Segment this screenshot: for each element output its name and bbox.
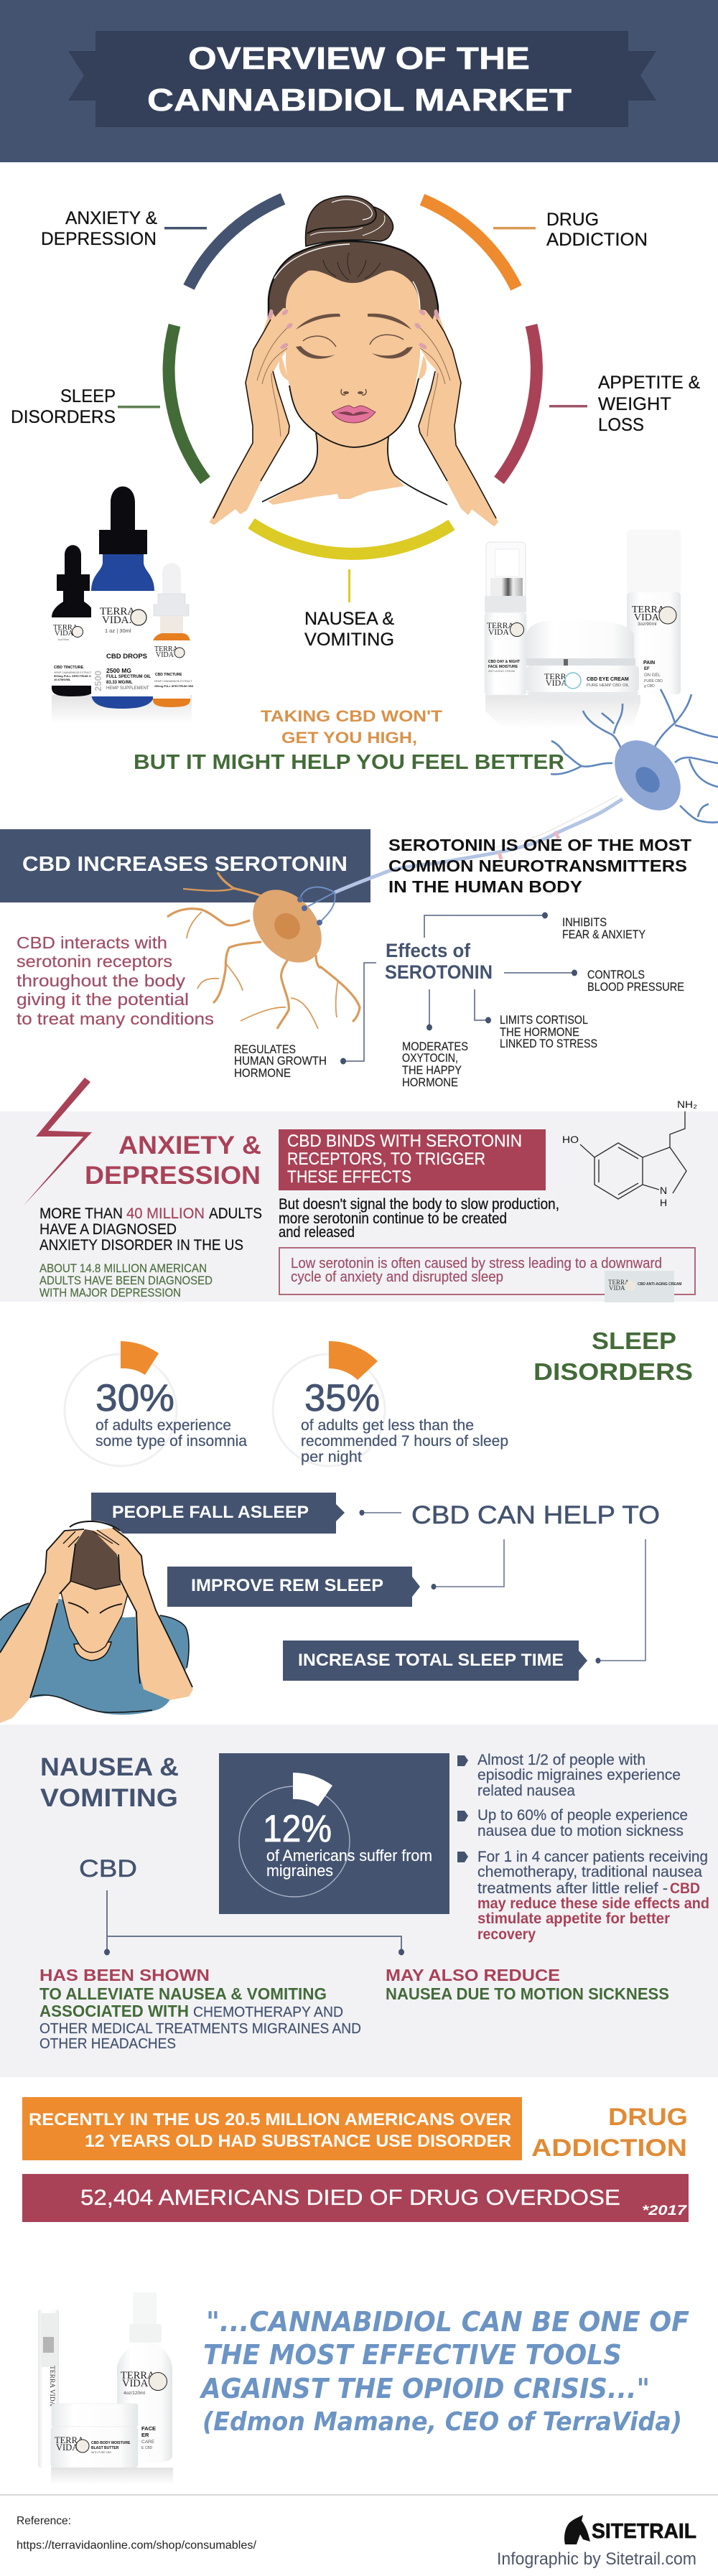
pen applicator bbox=[38, 2310, 59, 2468]
text: production: and released bbox=[279, 1224, 355, 1241]
product: small jar: TERRA bbox=[608, 1279, 630, 1286]
effects labels: OXYTOCIN, bbox=[402, 1051, 458, 1065]
stat: 40 million: ANXIETY DISORDER IN THE US bbox=[39, 1237, 243, 1254]
bullets: nausea facts: recovery bbox=[477, 1926, 536, 1943]
tagline bbox=[134, 707, 564, 774]
donut: 30 percent bbox=[65, 1341, 247, 1466]
card: 12 percent: migraines bbox=[266, 1862, 333, 1880]
bullets: nausea facts: Almost 1/2 of people with bbox=[477, 1752, 645, 1768]
spray bottle: CARE bbox=[141, 2440, 155, 2445]
body butter jar: CBD BODY MOISTURE bbox=[91, 2441, 131, 2445]
cream jar: CBD EYE CREAM bbox=[587, 677, 629, 682]
product: small jar: VIDA bbox=[609, 1284, 625, 1292]
banner: people fall asleep bbox=[91, 1493, 345, 1534]
text: has been shown: ASSOCIATED WITH bbox=[39, 2002, 189, 2020]
heading: sleep disorders: DISORDERS bbox=[533, 1358, 693, 1385]
receptor dots bbox=[297, 897, 322, 925]
title: OVERVIEW OF THE bbox=[188, 41, 530, 76]
header panel bbox=[0, 0, 718, 162]
cream jar: VIDA. bbox=[546, 678, 569, 688]
heading: serotonin fact: IN THE HUMAN BODY bbox=[388, 877, 582, 896]
blue bottle: TERRA bbox=[100, 606, 135, 617]
stat: 40 million: MORE THAN bbox=[39, 1205, 123, 1222]
effects labels: LIMITS CORTISOL bbox=[500, 1013, 588, 1027]
black bottle: TERRA bbox=[53, 624, 78, 632]
face bbox=[61, 1581, 128, 1653]
icon: lightning bolt bbox=[23, 1078, 92, 1206]
card: 12 percent bbox=[219, 1753, 449, 1914]
tall tube: PAIN bbox=[643, 661, 655, 666]
callout: low serotonin: Low serotonin is often caused by stress leading to a downward bbox=[291, 1256, 662, 1271]
logo: Sitetrail: SITETRAIL bbox=[592, 2520, 696, 2543]
arc: nausea bbox=[251, 523, 452, 554]
effects labels: FEAR & ANXIETY bbox=[562, 928, 645, 941]
stat: 40 million: ADULTS bbox=[209, 1205, 262, 1222]
body butter jar: VIDA bbox=[56, 2442, 78, 2453]
bullets: nausea facts: chemotherapy, traditional nausea bbox=[477, 1864, 702, 1880]
left hand bbox=[210, 308, 294, 524]
callout: substance use: RECENTLY IN THE US 20.5 MILLION AMERICANS OVER bbox=[29, 2110, 511, 2129]
credit: Infographic by Sitetrail.com bbox=[497, 2549, 696, 2569]
text: has been shown: OTHER HEADACHES bbox=[39, 2036, 176, 2052]
white gap behind the man's head bbox=[45, 1521, 144, 1618]
stat: 14.8 million: WITH MAJOR DEPRESSION bbox=[39, 1286, 181, 1299]
text: CBD interacts bbox=[17, 933, 214, 1028]
spray bottle: TERRA bbox=[121, 2370, 155, 2381]
callout: overdose deaths bbox=[22, 2174, 689, 2222]
body butter jar: TERRA bbox=[55, 2435, 84, 2445]
label: appetite bbox=[549, 373, 700, 435]
pump bottle: CBD DAY & NIGHT bbox=[488, 660, 520, 664]
references bbox=[17, 2515, 257, 2552]
label: appetite: APPETITE & bbox=[598, 373, 700, 393]
bullets: nausea facts: stimulate appetite for better bbox=[477, 1910, 670, 1927]
effects labels: MODERATES bbox=[402, 1040, 468, 1053]
hair bbox=[269, 241, 438, 323]
heading: nausea and vomiting: VOMITING bbox=[40, 1784, 178, 1812]
banner: increase total sleep time bbox=[283, 1641, 587, 1681]
blue bottle: 1 oz | 30ml bbox=[105, 627, 131, 634]
text: may also reduce bbox=[386, 1966, 669, 2003]
shirt bbox=[0, 1599, 189, 1714]
connectors bbox=[343, 915, 574, 1061]
tall tube: ON GEL bbox=[644, 673, 661, 678]
heading: serotonin fact bbox=[388, 836, 691, 896]
blue bottle: CBD DROPS bbox=[106, 653, 147, 661]
panel: CBD increases serotonin bbox=[0, 829, 370, 902]
hair bbox=[70, 1529, 121, 1590]
heading: nausea and vomiting bbox=[40, 1753, 179, 1812]
effects labels: LINKED TO STRESS bbox=[500, 1037, 597, 1050]
body butter jar bbox=[51, 2404, 138, 2468]
help connectors bbox=[359, 1510, 645, 1663]
woman with headache illustration bbox=[210, 196, 498, 526]
card: 12 percent: 12% bbox=[263, 1808, 332, 1850]
donut: 35 percent: recommended 7 hours of sleep bbox=[301, 1433, 508, 1450]
references: https://terravidaonline.com/shop/consumables/ bbox=[17, 2539, 257, 2552]
effects labels: HUMAN GROWTH bbox=[234, 1054, 327, 1068]
spray bottle: VIDA bbox=[122, 2378, 149, 2389]
label: sleep: DISORDERS bbox=[11, 407, 116, 427]
banner: people fall asleep: PEOPLE FALL ASLEEP bbox=[112, 1503, 309, 1522]
serotonin molecule: H bbox=[660, 1197, 667, 1208]
stat: 40 million bbox=[39, 1205, 262, 1254]
pump bottle: FACE MOISTURE bbox=[488, 665, 518, 669]
heading: nausea and vomiting: NAUSEA & bbox=[40, 1753, 179, 1781]
blue neuron bbox=[551, 689, 718, 823]
serotonin molecule: N bbox=[660, 1185, 667, 1196]
panel: nausea and vomiting bbox=[0, 1725, 718, 2077]
callout: overdose deaths: *2017 bbox=[642, 2203, 688, 2218]
serotonin molecule: NH₂ bbox=[677, 1098, 697, 1110]
blue bottle bbox=[91, 487, 154, 709]
neck lines bbox=[262, 433, 447, 505]
CBD branching diagram bbox=[79, 1855, 404, 1956]
blue bottle: FULL SPECTRUM OIL bbox=[106, 675, 151, 679]
text: CBD interacts: CBD interacts with bbox=[17, 933, 167, 952]
blue bottle: 2500 bbox=[93, 671, 103, 691]
text: may also reduce: MAY ALSO REDUCE bbox=[386, 1966, 560, 1984]
black bottle: VIDA bbox=[55, 630, 74, 638]
label: anxiety: ANXIETY & bbox=[65, 208, 157, 228]
callout: CBD binds: CBD BINDS WITH SEROTONIN bbox=[287, 1131, 522, 1151]
card: 12 percent: of Americans suffer from bbox=[266, 1847, 432, 1865]
banner: increase total sleep time: INCREASE TOTAL SLEEP TIME bbox=[298, 1651, 564, 1670]
left arm bbox=[0, 1529, 84, 1723]
neck and chin bbox=[74, 1642, 111, 1661]
tagline: BUT IT MIGHT HELP YOU FEEL BETTER bbox=[134, 751, 564, 774]
pump bottle: VIDA bbox=[488, 628, 509, 637]
orange bottle: 250mg FULL SPECTRUM CBD bbox=[154, 685, 194, 688]
label: nausea bbox=[304, 569, 394, 650]
text: CBD interacts: to treat many conditions bbox=[17, 1009, 214, 1028]
axon connecting neurons bbox=[300, 795, 623, 923]
tall tube: 3oz/90ml bbox=[638, 622, 657, 627]
bullets: nausea facts: For 1 in 4 cancer patients receiving bbox=[477, 1849, 708, 1865]
effects labels: CONTROLS bbox=[587, 968, 645, 981]
bullets: nausea facts: related nausea bbox=[477, 1783, 575, 1799]
banner: improve REM sleep bbox=[167, 1567, 420, 1607]
callout: substance use bbox=[22, 2097, 522, 2160]
heading: serotonin fact: SEROTONIN IS ONE OF THE MOST bbox=[388, 836, 691, 854]
CBD branching diagram: CBD bbox=[79, 1855, 137, 1882]
product group: body care bbox=[38, 2292, 173, 2485]
effects labels bbox=[234, 915, 684, 1089]
body butter jar: BLAST BUTTER bbox=[91, 2446, 119, 2450]
stat: 14.8 million: ABOUT 14.8 MILLION AMERICAN bbox=[39, 1261, 207, 1275]
label: drug addiction: DRUG bbox=[546, 210, 599, 230]
label: drug addiction: ADDICTION bbox=[546, 230, 648, 250]
tagline: TAKING CBD WON'T bbox=[261, 707, 443, 725]
text: has been shown bbox=[39, 1966, 361, 2052]
donut: 30 percent: some type of insomnia bbox=[95, 1433, 247, 1450]
arc: anxiety bbox=[189, 199, 283, 287]
stat: 40 million: 40 MILLION bbox=[126, 1205, 205, 1222]
lips bbox=[332, 406, 376, 423]
label: nausea: VOMITING bbox=[304, 630, 394, 650]
effects labels: HORMONE bbox=[234, 1066, 291, 1080]
blue bottle: HEMP SUPPLEMENT bbox=[106, 686, 149, 691]
orange bottle: TERRA bbox=[154, 645, 179, 653]
black bottle: 500mg FULL SPECTRUM CBD bbox=[54, 674, 95, 678]
label: nausea: NAUSEA & bbox=[304, 609, 394, 629]
bullets: nausea facts: CBD bbox=[670, 1880, 700, 1897]
callout: CBD binds: THESE EFFECTS bbox=[287, 1167, 411, 1187]
orange bottle bbox=[153, 563, 194, 707]
label: drug addiction bbox=[493, 210, 648, 250]
panel: anxiety and depression bbox=[0, 1078, 718, 1302]
face bbox=[286, 271, 420, 447]
product: small jar bbox=[605, 1271, 681, 1302]
label: sleep: SLEEP bbox=[60, 386, 116, 406]
orange neuron bbox=[167, 872, 360, 1029]
labels: ring conditions bbox=[11, 208, 700, 650]
cream jar bbox=[526, 620, 639, 701]
title ribbon bbox=[68, 31, 656, 127]
bun bbox=[306, 196, 393, 246]
body butter jar: WITH PURE CBD bbox=[91, 2451, 111, 2454]
effects labels: BLOOD PRESSURE bbox=[587, 980, 684, 994]
arc: appetite bbox=[499, 325, 536, 480]
neck and chest bbox=[268, 433, 404, 505]
black bottle: 16.67MG/ML bbox=[54, 678, 71, 681]
man with headache illustration bbox=[0, 1521, 193, 1723]
heading: anxiety and depression: DEPRESSION bbox=[85, 1162, 261, 1190]
heading: sleep disorders: SLEEP bbox=[592, 1327, 676, 1354]
blue bottle: 2500 MG bbox=[106, 667, 131, 674]
label: anxiety bbox=[41, 208, 207, 249]
ears bbox=[279, 355, 426, 381]
quote: THE MOST EFFECTIVE TOOLS bbox=[203, 2339, 622, 2371]
cream jar: PURE HEMP CBD OIL bbox=[587, 683, 630, 688]
heading: drug addiction bbox=[531, 2104, 688, 2162]
panel: CBD increases serotonin: CBD INCREASES SEROTONIN bbox=[22, 853, 348, 876]
tall tube: g CBD bbox=[644, 684, 655, 689]
effects heading bbox=[385, 940, 493, 983]
quote: (Edmon Mamane, CEO of TerraVida) bbox=[202, 2407, 682, 2437]
text: CBD interacts: serotonin receptors bbox=[17, 952, 172, 971]
tall tube: VIDA bbox=[634, 612, 660, 623]
panel: drug addiction bbox=[22, 2097, 689, 2222]
heading: sleep disorders bbox=[533, 1327, 693, 1385]
right arm bbox=[93, 1528, 193, 1700]
product: small jar: CBD ANTI-AGING CREAM bbox=[638, 1282, 681, 1287]
donut: 35 percent: per night bbox=[301, 1449, 362, 1465]
heading: drug addiction: ADDICTION bbox=[531, 2134, 687, 2162]
spray bottle: E CBD bbox=[141, 2446, 153, 2450]
condition ring bbox=[169, 199, 536, 554]
bullets: nausea facts: nausea due to motion sickness bbox=[477, 1823, 684, 1839]
heading: serotonin fact: COMMON NEUROTRANSMITTERS bbox=[388, 857, 687, 875]
quote: AGAINST THE OPIOID CRISIS..." bbox=[199, 2373, 650, 2404]
black bottle: 1oz/30ml bbox=[57, 638, 69, 641]
orange bottle: HEMP CANNABINOID EXTRACT bbox=[154, 680, 192, 683]
serotonin molecule bbox=[562, 1098, 697, 1208]
arc: drug addiction bbox=[422, 200, 516, 288]
heading: anxiety and depression bbox=[85, 1131, 261, 1190]
bullets: nausea facts: episodic migraines experience bbox=[477, 1767, 681, 1783]
blue bottle: VIDA. bbox=[102, 615, 131, 626]
tall tube: TERRA bbox=[632, 605, 666, 615]
callout: low serotonin bbox=[279, 1248, 695, 1294]
spray bottle: 4oz/120ml bbox=[123, 2391, 146, 2396]
effects of serotonin diagram bbox=[234, 912, 684, 1089]
heading: CBD can help to: CBD CAN HELP TO bbox=[411, 1501, 660, 1529]
label: appetite: LOSS bbox=[598, 415, 644, 435]
text: production bbox=[279, 1196, 559, 1241]
title bbox=[147, 41, 572, 118]
quote bbox=[199, 2306, 689, 2437]
black bottle: HEMP CANNABINOID EXTRACT bbox=[54, 671, 92, 674]
stat: 14.8 million: ADULTS HAVE BEEN DIAGNOSED bbox=[39, 1274, 213, 1287]
text: may also reduce: NAUSEA DUE TO MOTION SICKNESS bbox=[386, 1984, 669, 2003]
donut: 35 percent: 35% bbox=[304, 1377, 380, 1419]
tall tube: PURE CBD bbox=[644, 679, 663, 683]
pump bottle bbox=[485, 542, 526, 695]
banner: improve REM sleep: IMPROVE REM SLEEP bbox=[191, 1576, 383, 1595]
heading: drug addiction: DRUG bbox=[608, 2104, 688, 2131]
donut: 30 percent: of adults experience bbox=[95, 1417, 231, 1434]
orange bottle: CBD TINCTURE bbox=[155, 673, 182, 677]
text: has been shown: HAS BEEN SHOWN bbox=[39, 1966, 210, 1984]
text: CBD interacts: giving it the potential bbox=[17, 990, 189, 1009]
right hand bbox=[414, 308, 498, 526]
effects labels: THE HORMONE bbox=[500, 1025, 579, 1039]
text: production: But doesn't signal the body to slow production, bbox=[279, 1196, 559, 1213]
callout: CBD binds: RECEPTORS, TO TRIGGER bbox=[287, 1149, 485, 1169]
spray bottle: FACE bbox=[141, 2425, 156, 2432]
text: has been shown: CHEMOTHERAPY AND bbox=[193, 2005, 343, 2020]
donut: 30 percent: 30% bbox=[95, 1377, 174, 1419]
logo: Sitetrail bbox=[564, 2515, 696, 2544]
black bottle bbox=[52, 545, 95, 696]
label: appetite: WEIGHT bbox=[598, 394, 671, 414]
donut: 35 percent: of adults get less than the bbox=[301, 1417, 474, 1434]
stat: 14.8 million bbox=[39, 1261, 213, 1299]
cream jar: TERRA bbox=[544, 671, 573, 681]
text: production: more serotonin continue to be created bbox=[279, 1210, 507, 1227]
callout: substance use: 12 YEARS OLD HAD SUBSTANCE USE DISORDER bbox=[85, 2132, 511, 2151]
heading: anxiety and depression: ANXIETY & bbox=[118, 1131, 261, 1159]
label: sleep bbox=[11, 386, 160, 427]
product group: skincare bbox=[485, 530, 681, 729]
tall tube: EF bbox=[644, 667, 650, 671]
tall tube bbox=[627, 530, 681, 694]
effects labels: INHIBITS bbox=[562, 915, 607, 929]
text: CBD interacts: throughout the body bbox=[17, 971, 186, 990]
references: Reference: bbox=[17, 2515, 71, 2527]
callout: overdose deaths: 52,404 AMERICANS DIED OF DRUG OVERDOSE bbox=[80, 2185, 620, 2210]
effects heading: Effects of bbox=[386, 940, 471, 961]
bullets: nausea facts: Up to 60% of people experience bbox=[477, 1807, 688, 1824]
facial features bbox=[296, 314, 413, 359]
spray bottle bbox=[117, 2292, 172, 2463]
bullets: nausea facts: treatments after little relief - bbox=[477, 1880, 668, 1897]
orange bottle: VIDA bbox=[156, 651, 174, 659]
stat: 40 million: HAVE A DIAGNOSED bbox=[39, 1221, 177, 1238]
product group: tinctures bbox=[52, 487, 194, 724]
icon: horse head bbox=[564, 2515, 590, 2544]
panel: sleep disorders bbox=[0, 1327, 693, 1723]
label: anxiety: DEPRESSION bbox=[41, 229, 157, 249]
effects labels: THE HAPPY bbox=[402, 1063, 462, 1077]
title: CANNABIDIOL MARKET bbox=[147, 83, 572, 118]
text: has been shown: OTHER MEDICAL TREATMENTS MIGRAINES AND bbox=[39, 2021, 361, 2037]
blue bottle: 83.33 MG/ML bbox=[106, 681, 133, 685]
donut: 35 percent bbox=[273, 1341, 508, 1466]
serotonin molecule: HO bbox=[562, 1134, 579, 1145]
arc: sleep bbox=[169, 325, 205, 480]
pen applicator: TERRA VIDA bbox=[48, 2366, 55, 2407]
spray bottle: ER bbox=[141, 2432, 149, 2438]
callout: CBD binds bbox=[279, 1129, 546, 1190]
text: has been shown: TO ALLEVIATE NAUSEA & VOMITING bbox=[39, 1984, 327, 2003]
bullets: nausea facts: may reduce these side effects and bbox=[477, 1895, 709, 1912]
bullets: nausea facts bbox=[457, 1752, 709, 1943]
tagline: GET YOU HIGH, bbox=[281, 729, 417, 747]
pump bottle: TERRA bbox=[487, 622, 514, 630]
black bottle: CBD TINCTURE bbox=[54, 666, 84, 670]
pump bottle: ANTI-AGING CREAM bbox=[488, 670, 515, 673]
effects labels: HORMONE bbox=[402, 1075, 458, 1089]
quote: "...CANNABIDIOL CAN BE ONE OF bbox=[206, 2306, 689, 2338]
effects heading: SEROTONIN bbox=[385, 961, 493, 983]
callout: low serotonin: cycle of anxiety and disrupted sleep bbox=[291, 1269, 503, 1285]
effects labels: REGULATES bbox=[234, 1042, 296, 1056]
brows bbox=[68, 1602, 122, 1613]
